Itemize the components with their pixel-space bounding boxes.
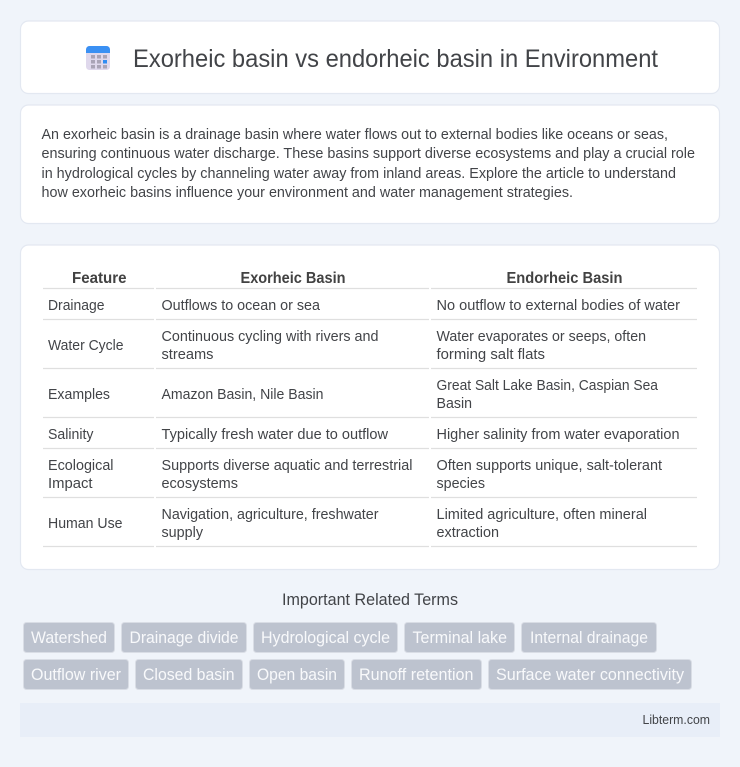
footer: Libterm.com: [642, 713, 710, 727]
row: ecological impact: Impact: [48, 476, 92, 492]
panel: comparison table: [20, 245, 720, 570]
row: ecological impact: Ecological: [48, 458, 114, 474]
row: drainage: [48, 298, 680, 314]
panel: header: [20, 21, 720, 94]
footer: [20, 703, 720, 737]
row: water cycle: Continuous cycling with rivers and: [162, 329, 378, 345]
tags: related terms: Open basin: [257, 666, 337, 684]
tags: related terms: [24, 622, 692, 690]
tags: related terms: Surface water connectivity: [496, 666, 685, 684]
row: examples: Great Salt Lake Basin, Caspian Sea: [436, 378, 659, 394]
row: drainage: Drainage: [48, 298, 104, 314]
row: ecological impact: species: [436, 476, 485, 492]
row: water cycle: Water evaporates or seeps, often: [436, 329, 646, 345]
text block: introduction: ensuring continuous water discharge. These basins support diverse ecosystems and play a crucial role: [42, 146, 695, 162]
row: human use: [48, 507, 647, 541]
table header: Exorheic Basin: [240, 270, 346, 287]
tags: related terms: Outflow river: [31, 666, 121, 684]
table header: Endorheic Basin: [506, 270, 622, 287]
icon: calendar: [86, 46, 110, 70]
row: ecological impact: Supports diverse aquatic and terrestrial: [162, 458, 412, 474]
row: human use: extraction: [436, 525, 499, 541]
row: human use: Limited agriculture, often mineral: [436, 507, 647, 523]
row: water cycle: Water Cycle: [48, 338, 124, 354]
row: drainage: No outflow to external bodies of water: [436, 298, 680, 314]
row: drainage: Outflows to ocean or sea: [162, 298, 321, 314]
row: human use: Navigation, agriculture, freshwater: [162, 507, 379, 523]
row: water cycle: streams: [162, 347, 214, 363]
tags: related terms: Internal drainage: [530, 629, 648, 647]
row: examples: Basin: [436, 396, 472, 412]
row: human use: Human Use: [48, 516, 122, 532]
title: Exorheic basin vs endorheic basin in Environment: [133, 45, 658, 73]
row: examples: [48, 378, 659, 412]
tags: related terms: Runoff retention: [359, 666, 474, 684]
table header: Feature: [72, 270, 127, 287]
text block: introduction: in hydrological cycles by channeling water away from inland areas. Explore the article to understand: [42, 166, 676, 182]
tags: related terms: Drainage divide: [130, 629, 238, 647]
row: ecological impact: Often supports unique, salt-tolerant: [436, 458, 662, 474]
row: water cycle: [48, 329, 646, 363]
row: ecological impact: ecosystems: [162, 476, 238, 492]
text block: introduction: [42, 127, 695, 201]
row: salinity: Typically fresh water due to outflow: [162, 427, 389, 443]
row: salinity: [48, 427, 680, 443]
row: water cycle: forming salt flats: [436, 347, 545, 363]
table header: [72, 270, 622, 287]
tags: related terms: Closed basin: [143, 666, 234, 684]
tags: related terms: Hydrological cycle: [261, 629, 390, 647]
tags: related terms: Watershed: [31, 629, 107, 647]
heading: related terms: Important Related Terms: [282, 591, 458, 609]
row: examples: Examples: [48, 387, 110, 403]
row: salinity: Higher salinity from water evaporation: [436, 427, 680, 443]
text block: introduction: An exorheic basin is a drainage basin where water flows out to external bodies like oceans or seas,: [42, 127, 668, 143]
row: ecological impact: [48, 458, 662, 492]
tags: related terms: Terminal lake: [412, 629, 507, 647]
row: salinity: Salinity: [48, 427, 94, 443]
row: human use: supply: [162, 525, 204, 541]
text block: introduction: how exorheic basins influence your environment and water management strategies.: [42, 185, 573, 201]
row: examples: Amazon Basin, Nile Basin: [162, 387, 324, 403]
panel: introduction: [20, 105, 720, 224]
